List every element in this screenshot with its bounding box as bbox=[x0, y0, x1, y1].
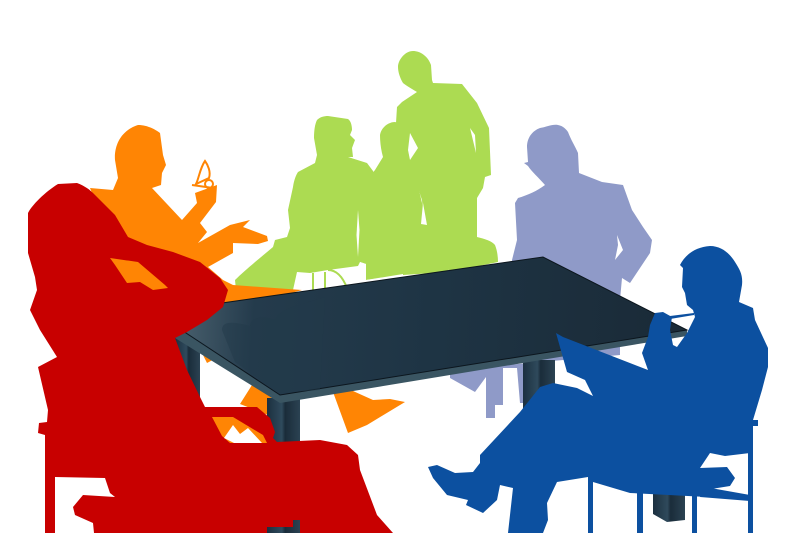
table reflection bbox=[222, 297, 325, 393]
table leg: far right bbox=[653, 480, 685, 522]
white gap at chair arm bbox=[224, 425, 262, 443]
orange gap in folded arm bbox=[110, 258, 168, 290]
orange leg under table bbox=[198, 345, 272, 415]
green figure details: slits and stool bbox=[293, 133, 427, 300]
person: blue seated man with folder bbox=[428, 246, 768, 533]
table top bbox=[183, 257, 687, 395]
person: orange man gesturing bbox=[90, 125, 405, 433]
blue chair bbox=[588, 420, 758, 533]
gap at chair arm bbox=[212, 417, 267, 443]
table leg: back right bbox=[523, 360, 555, 410]
eyeglasses bbox=[192, 161, 213, 188]
person: green seated man bbox=[235, 116, 380, 300]
orange body and hands bbox=[90, 125, 302, 310]
pen bbox=[670, 313, 694, 319]
table edge band bbox=[175, 330, 687, 403]
orange shin and shoe bbox=[333, 391, 405, 433]
person: lavender standing man bbox=[450, 125, 652, 418]
blue body bbox=[428, 246, 768, 533]
person: green standing man bbox=[396, 51, 498, 272]
table leg: front bbox=[267, 398, 300, 533]
table bbox=[175, 257, 687, 533]
person: red man in chair bbox=[28, 183, 393, 533]
person: green seated woman bbox=[360, 122, 450, 280]
table leg: back left bbox=[175, 336, 200, 400]
red body and chair bbox=[28, 183, 393, 533]
